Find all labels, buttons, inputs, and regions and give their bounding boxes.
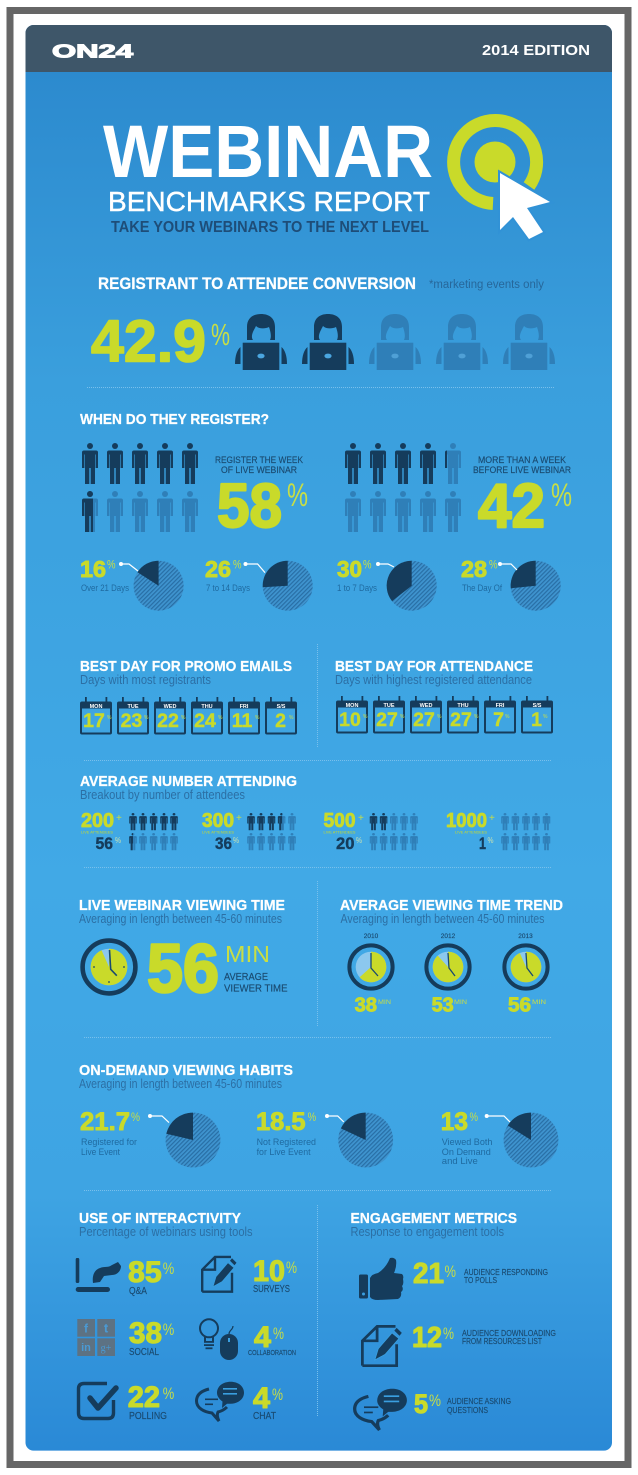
heading: ON-DEMAND VIEWING HABITS [79, 1062, 293, 1079]
calendars: % [505, 714, 510, 720]
people: 42 percent [345, 443, 461, 532]
pie: the day of: 28 [461, 556, 487, 582]
pie: registered for live event: % [131, 1110, 140, 1124]
item: questions: AUDIENCE ASKING [447, 1397, 511, 1406]
title: WEBINAR [103, 110, 433, 193]
figure: 58 percent: 58 [217, 472, 282, 541]
clock: 2012: 2012 [441, 933, 456, 940]
item: social: g+ [101, 1343, 112, 1354]
item: Q and A: % [163, 1259, 174, 1278]
group: 200 plus: + [116, 813, 122, 824]
conversion figure: 42.9 [91, 308, 206, 374]
label: more than a week: BEFORE LIVE WEBINAR [473, 465, 571, 476]
item: resources: FROM RESOURCES LIST [462, 1337, 542, 1346]
conversion figure: % [211, 317, 230, 352]
title block [103, 110, 433, 236]
calendars: % [363, 714, 368, 720]
calendars [80, 697, 297, 734]
item: social: 38 [129, 1317, 162, 1350]
figure: 42 percent: 42 [478, 472, 545, 541]
clock: 2010 [349, 933, 393, 1017]
heading: LIVE WEBINAR VIEWING TIME [79, 897, 285, 914]
pie: viewed both: On Demand [442, 1147, 491, 1158]
calendars: 11 [232, 710, 252, 732]
figure: 58 percent: % [287, 477, 308, 513]
clock: 2010: 38 [355, 995, 377, 1017]
subtitle: BENCHMARKS REPORT [108, 186, 430, 217]
section: use of interactivity [76, 1210, 297, 1422]
calendars: 2 [275, 710, 286, 732]
item: Q and A: 85 [128, 1256, 162, 1289]
group: 300 plus [202, 812, 296, 850]
label: register the week [215, 455, 304, 476]
calendars: % [400, 714, 405, 720]
group: 300 plus: 36 [215, 834, 232, 853]
group: 200 plus: LIVE ATTENDEES [81, 830, 113, 834]
figure: 56 min: 56 [147, 930, 219, 1007]
group: 200 plus: % [115, 836, 121, 845]
heading: AVERAGE NUMBER ATTENDING [80, 773, 297, 790]
icons: attendees at laptops [235, 314, 555, 370]
calendars: MON [90, 704, 102, 710]
calendars: 27 [376, 709, 398, 731]
item: collaboration [200, 1319, 296, 1360]
calendars: % [107, 715, 112, 721]
pie: 7 to 14 days: % [233, 558, 242, 572]
pie: 7 to 14 days: 7 to 14 Days [206, 583, 250, 594]
group: 300 plus: LIVE ATTENDEES [202, 830, 234, 834]
pie: over 21 days: 16 [80, 556, 106, 582]
section: best day for attendance [335, 658, 553, 734]
figure: 56 min [147, 930, 288, 1007]
group: 1000 plus: 1000 [446, 810, 487, 832]
heading: ENGAGEMENT METRICS [350, 1210, 517, 1227]
pie: over 21 days: Over 21 Days [81, 583, 129, 594]
item: polls: TO POLLS [464, 1276, 497, 1285]
label: register the week: OF LIVE WEBINAR [221, 465, 297, 476]
section: average number attending [80, 773, 550, 853]
item: polls [359, 1258, 548, 1300]
calendars: THU [457, 703, 469, 709]
pie: over 21 days [80, 556, 184, 611]
pie: viewed both [441, 1108, 558, 1167]
pie: viewed both: Viewed Both [442, 1137, 492, 1148]
figure: 56 min: AVERAGE [224, 972, 268, 983]
calendars: % [474, 714, 479, 720]
item: collaboration: % [273, 1324, 284, 1343]
item: questions [355, 1389, 511, 1430]
clock: 2013: 2013 [518, 933, 533, 940]
item: social [77, 1317, 174, 1358]
item: resources: 12 [412, 1322, 442, 1354]
group: 1000 plus: + [489, 813, 495, 824]
item: resources: AUDIENCE DOWNLOADING [462, 1329, 556, 1338]
pie: not registered for live event: for Live Event [257, 1147, 311, 1158]
pie: the day of [461, 556, 561, 611]
icon: large clock [83, 941, 135, 993]
subheading: Days with highest registered attendance [335, 673, 532, 687]
pie: not registered for live event: Not Registered [257, 1137, 316, 1148]
item: polling [78, 1381, 174, 1422]
item: surveys: % [286, 1258, 297, 1277]
label: more than a week: MORE THAN A WEEK [478, 455, 567, 466]
item: social: in [81, 1342, 91, 1354]
subheading: Percentage of webinars using tools [79, 1225, 253, 1239]
heading: AVERAGE VIEWING TIME TREND [340, 897, 563, 914]
group: 200 plus: 56 [96, 834, 113, 853]
clock: 2010: MIN [378, 1000, 391, 1006]
calendars: TUE [128, 704, 139, 710]
pie: the day of: The Day Of [462, 583, 502, 594]
pie: 7 to 14 days: 26 [205, 556, 231, 582]
calendars [336, 696, 553, 734]
calendars: % [437, 714, 442, 720]
calendars: % [181, 715, 186, 721]
pie: registered for live event: Live Event [81, 1147, 120, 1158]
pie: viewed both: % [470, 1110, 478, 1124]
pie: registered for live event [80, 1108, 220, 1167]
item: resources: % [443, 1324, 454, 1343]
subheading: Breakout by number of attendees [80, 788, 245, 802]
pie: registered for live event: 21.7 [80, 1108, 130, 1136]
clock: 2010: 2010 [364, 933, 379, 940]
item: collaboration: 4 [254, 1321, 272, 1354]
group: 500 plus: + [358, 813, 364, 824]
item: social: SOCIAL [129, 1347, 159, 1358]
heading: WHEN DO THEY REGISTER? [80, 411, 269, 428]
pie: the day of: % [489, 558, 498, 572]
calendars: 7 [493, 709, 504, 731]
calendars: 27 [413, 709, 435, 731]
logo: ON24 [52, 40, 134, 62]
calendars: 23 [121, 710, 142, 732]
calendars: % [543, 714, 548, 720]
heading: BEST DAY FOR PROMO EMAILS [80, 658, 292, 675]
clock: 2012: 53 [432, 995, 454, 1017]
calendars: 1 [531, 709, 542, 731]
item: social: f [84, 1322, 89, 1336]
clock: 2013: MIN [532, 1000, 546, 1006]
subheading: Averaging in length between 45-60 minutes [79, 1077, 282, 1091]
group: 1000 plus: LIVE ATTENDEES [455, 830, 487, 834]
group: 500 plus: LIVE ATTENDEES [324, 830, 356, 834]
calendars: % [218, 715, 223, 721]
calendars: % [255, 715, 260, 721]
section: registrant conversion [91, 275, 555, 374]
group: 200 plus: 200 [81, 810, 114, 832]
pie: not registered for live event: 18.5 [256, 1108, 306, 1136]
section: best day for promo emails [80, 658, 297, 734]
note: *marketing events only [429, 279, 544, 291]
group: 500 plus: 20 [336, 834, 354, 853]
pie: over 21 days: % [107, 558, 116, 572]
calendars: 22 [157, 710, 179, 732]
calendars: 24 [194, 710, 216, 732]
calendars: 17 [83, 710, 105, 732]
item: social: % [163, 1320, 174, 1339]
figure: 56 min: VIEWER TIME [224, 984, 288, 995]
calendars: THU [201, 704, 213, 710]
subheading: Response to engagement tools [350, 1225, 504, 1239]
subheading: Averaging in length between 45-60 minutes [79, 912, 282, 926]
item: polling: 22 [128, 1381, 160, 1414]
figure: 56 min: MIN [225, 941, 270, 967]
heading: USE OF INTERACTIVITY [79, 1210, 241, 1227]
clock: 2013 [504, 933, 548, 1017]
item: resources [362, 1322, 556, 1366]
group: 1000 plus: % [488, 836, 494, 845]
clock: 2013: 56 [508, 995, 531, 1017]
label: more than a week [473, 455, 571, 476]
subheading: Days with most registrants [80, 673, 211, 687]
pie: 1 to 7 days: 1 to 7 Days [337, 583, 377, 594]
item: Q and A: Q&A [129, 1286, 147, 1297]
item: questions: % [429, 1391, 441, 1410]
item: surveys: SURVEYS [253, 1284, 290, 1295]
calendars: WED [164, 704, 176, 710]
group: 500 plus: 500 [324, 810, 356, 832]
group: 300 plus: % [233, 836, 239, 845]
clock: 2012 [426, 933, 470, 1017]
calendars: WED [420, 703, 432, 709]
subheading: Averaging in length between 45-60 minutes [340, 912, 544, 926]
group: 300 plus: 300 [202, 810, 234, 832]
pie: viewed both: and Live [442, 1156, 478, 1167]
pie: viewed both: 13 [441, 1108, 468, 1136]
pie: 1 to 7 days: % [363, 558, 372, 572]
calendars: FRI [240, 704, 249, 710]
calendars: S/S [277, 704, 286, 710]
icon: target and cursor [454, 121, 550, 239]
pie: not registered for live event [256, 1108, 393, 1167]
pie: 7 to 14 days [205, 556, 313, 611]
people: 58 percent [82, 443, 198, 532]
tagline: TAKE YOUR WEBINARS TO THE NEXT LEVEL [111, 219, 429, 236]
section: average viewing time trend [340, 897, 563, 1017]
section: engagement metrics [350, 1210, 556, 1430]
calendars: 27 [450, 709, 472, 731]
item: chat: % [272, 1385, 283, 1404]
item: chat: CHAT [253, 1411, 276, 1422]
item: chat [196, 1382, 283, 1422]
group: 1000 plus: 1 [479, 834, 486, 853]
item: polling: POLLING [129, 1411, 167, 1422]
heading: REGISTRANT TO ATTENDEE CONVERSION [98, 275, 416, 293]
calendars: FRI [496, 703, 505, 709]
group: 500 plus: % [356, 836, 362, 845]
group: 500 plus [324, 810, 418, 853]
item: Q and A [76, 1256, 174, 1297]
item: polls: AUDIENCE RESPONDING [464, 1268, 548, 1277]
label: register the week: REGISTER THE WEEK [215, 455, 304, 466]
item: surveys [202, 1255, 297, 1295]
calendars: TUE [384, 703, 395, 709]
group: 200 plus [81, 812, 178, 850]
section: when do they register [80, 411, 572, 611]
item: questions: 5 [414, 1389, 428, 1419]
section: on-demand viewing habits [79, 1062, 558, 1167]
figure: 42 percent: % [551, 477, 572, 513]
item: surveys: 10 [253, 1255, 285, 1288]
pie: 1 to 7 days [337, 556, 437, 611]
heading: BEST DAY FOR ATTENDANCE [335, 658, 533, 675]
item: social: t [104, 1320, 109, 1336]
item: polls: 21 [413, 1258, 444, 1290]
item: polling: % [163, 1384, 174, 1403]
header bar [26, 25, 612, 72]
calendars: % [144, 715, 149, 721]
item: chat: 4 [253, 1382, 271, 1415]
item: collaboration: COLLABORATION [248, 1350, 296, 1357]
item: questions: QUESTIONS [447, 1406, 488, 1415]
calendars: S/S [533, 703, 542, 709]
calendars: 10 [339, 709, 361, 731]
calendars: % [289, 715, 294, 721]
item: polls: % [444, 1262, 456, 1281]
group: 1000 plus [446, 810, 550, 853]
clock: 2012: MIN [454, 1000, 467, 1006]
calendars: MON [346, 703, 358, 709]
pie: not registered for live event: % [308, 1110, 316, 1124]
group: 300 plus: + [236, 813, 242, 824]
edition label: 2014 EDITION [482, 42, 590, 59]
pie: registered for live event: Registered for [81, 1137, 137, 1148]
pie: 1 to 7 days: 30 [337, 556, 362, 582]
section: live webinar viewing time [79, 897, 288, 1007]
